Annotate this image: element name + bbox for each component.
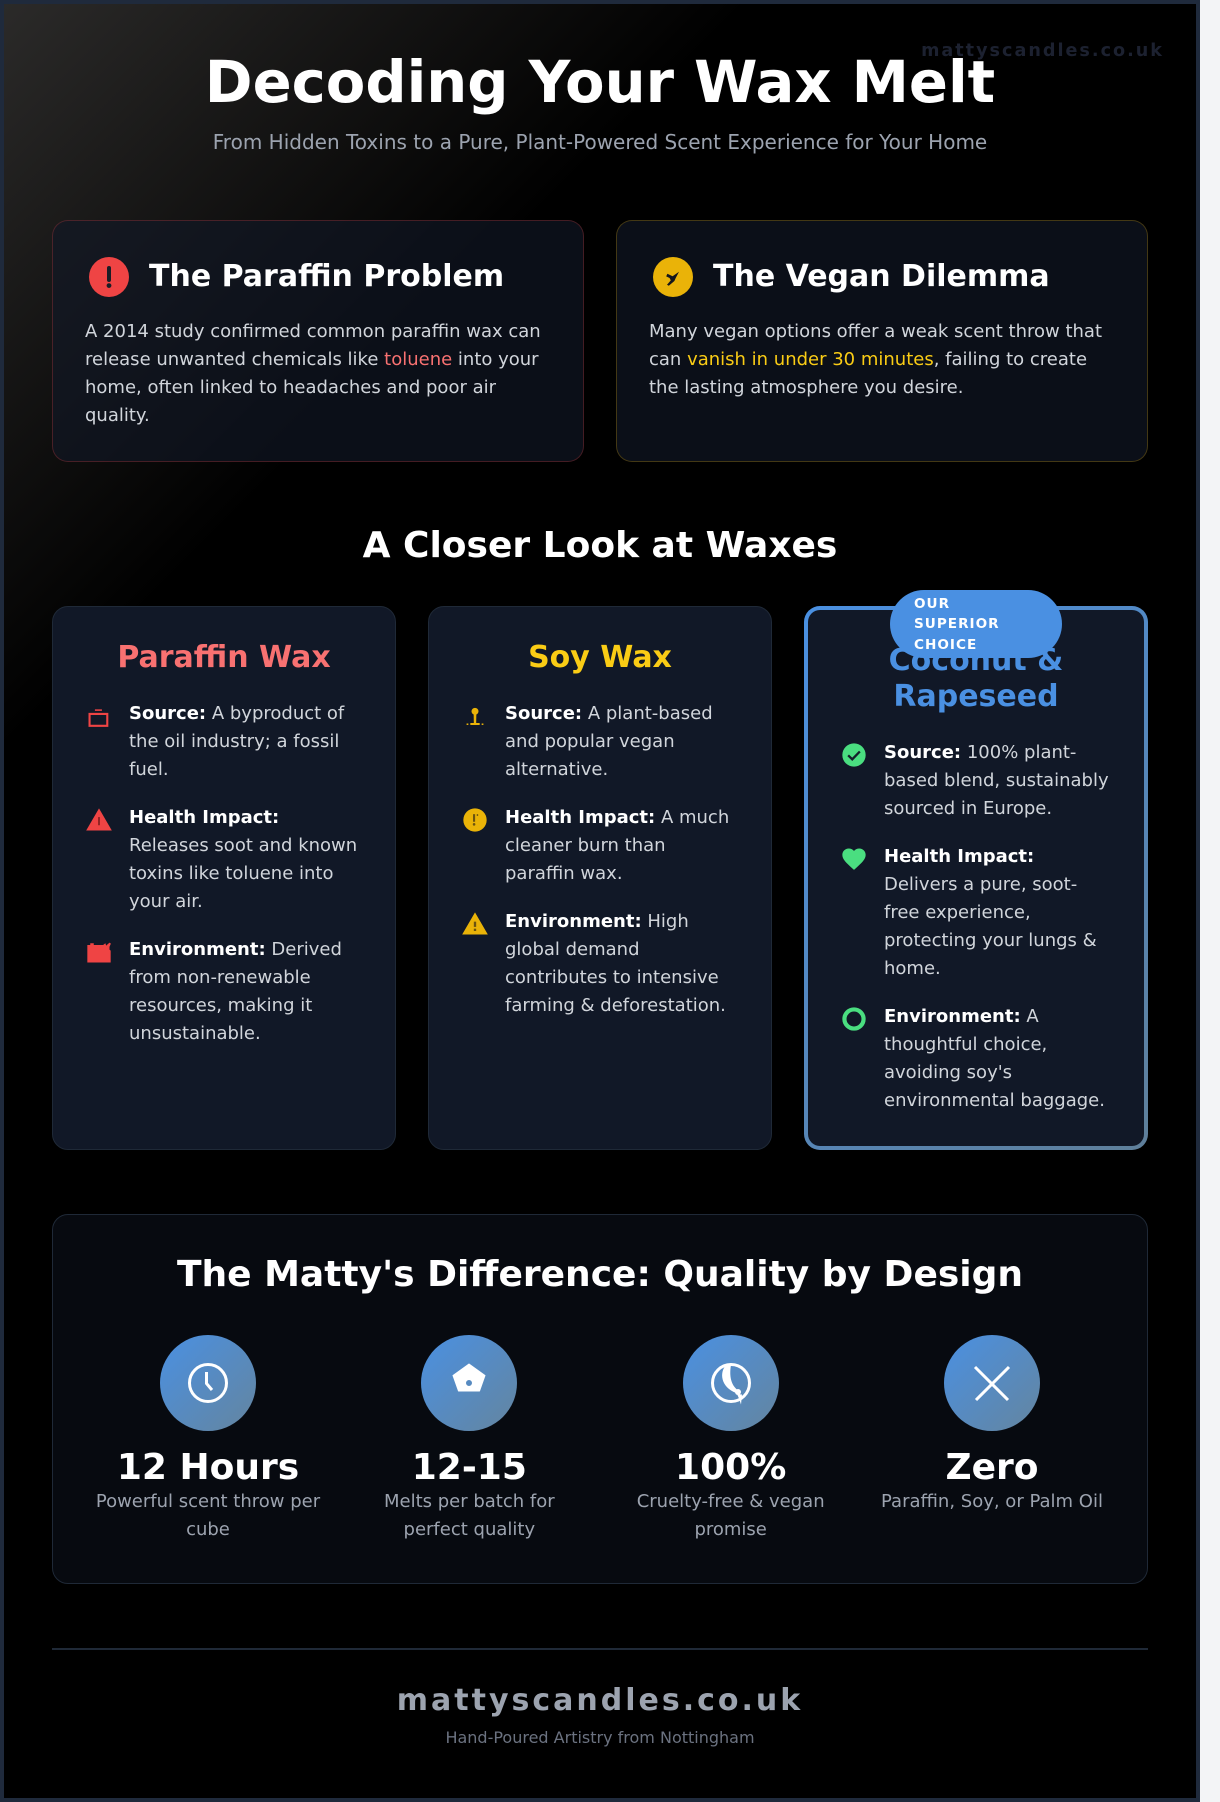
item: coconut environment: Environment: A xyxy=(884,1006,1039,1027)
stat value: 12 Hours xyxy=(117,1447,299,1488)
item: coconut health: Health Impact: xyxy=(884,846,1034,867)
item: paraffin health: Health Impact: xyxy=(129,807,279,828)
item: soy source: Source: A plant-based xyxy=(505,703,713,724)
item: coconut source: Source: 100% plant- xyxy=(884,742,1076,763)
panel: the matty's difference xyxy=(52,1214,1148,1584)
panel: coconut and rapeseed xyxy=(804,606,1148,1150)
stat: 12 hours xyxy=(96,1335,320,1540)
text: paraffin problem: release unwanted chemicals like toluene into your xyxy=(85,349,539,370)
item: paraffin environment: Environment: Derived xyxy=(129,939,342,960)
item: paraffin environment xyxy=(87,939,342,1044)
subtitle: From Hidden Toxins to a Pure, Plant-Powered Scent Experience for Your Home xyxy=(213,130,987,154)
heading: coconut and rapeseed xyxy=(889,643,1063,714)
stat label: Paraffin, Soy, or Palm Oil xyxy=(881,1490,1103,1512)
item: coconut source: based blend, sustainably xyxy=(884,770,1109,791)
stat label: perfect quality xyxy=(404,1518,535,1540)
icon: clock xyxy=(160,1335,256,1431)
badge: our superior choice xyxy=(890,590,1062,658)
item: soy source: and popular vegan xyxy=(505,731,675,752)
stat label xyxy=(96,1490,320,1540)
item: coconut health: home. xyxy=(884,958,941,979)
item: paraffin source xyxy=(88,703,345,780)
stat: 12-15 xyxy=(384,1335,555,1540)
item: paraffin environment: resources, making it xyxy=(129,995,312,1016)
item: coconut environment: thoughtful choice, xyxy=(884,1034,1047,1055)
stat: 100% xyxy=(637,1335,825,1540)
heading: coconut and rapeseed: Rapeseed xyxy=(893,679,1059,714)
watermark: mattyscandles.co.uk xyxy=(921,41,1164,61)
item: paraffin environment: unsustainable. xyxy=(129,1023,261,1044)
text: vegan dilemma: Many vegan options offer a weak scent throw that xyxy=(649,321,1102,342)
panel: paraffin wax xyxy=(52,606,396,1150)
item: paraffin source: Source: A byproduct of xyxy=(129,703,344,724)
text: paraffin problem: A 2014 study confirmed common paraffin wax can xyxy=(85,321,541,342)
item: coconut health xyxy=(842,846,1097,979)
heading: paraffin wax: Paraffin Wax xyxy=(117,640,331,675)
item: soy source: alternative. xyxy=(505,759,608,780)
title: Decoding Your Wax Melt xyxy=(205,49,995,116)
item: soy environment: Environment: High xyxy=(505,911,689,932)
stat value: 12-15 xyxy=(412,1447,527,1488)
stat label: Powerful scent throw per xyxy=(96,1490,320,1512)
item: coconut environment: avoiding soy's xyxy=(884,1062,1012,1083)
stat label: Cruelty-free & vegan xyxy=(637,1490,825,1512)
item: coconut source xyxy=(842,742,1109,819)
item: coconut health: free experience, xyxy=(884,902,1031,923)
panel: the paraffin problem xyxy=(52,220,584,462)
text: paraffin problem: home, often linked to headaches and poor air xyxy=(85,377,496,398)
item: coconut health: protecting your lungs & xyxy=(884,930,1097,951)
badge: our superior choice: OUR xyxy=(914,596,950,612)
footer tagline: Hand-Poured Artistry from Nottingham xyxy=(445,1728,755,1747)
heading: paraffin problem: The Paraffin Problem xyxy=(149,259,504,294)
item: paraffin source: fuel. xyxy=(129,759,169,780)
heading: coconut and rapeseed: Coconut & xyxy=(889,643,1063,678)
heading: soy wax: Soy Wax xyxy=(528,640,672,675)
text: paraffin problem: quality. xyxy=(85,405,150,426)
stat: zero xyxy=(881,1335,1103,1512)
stat value: 100% xyxy=(675,1447,786,1488)
item: paraffin health xyxy=(86,807,357,912)
item: soy health: Health Impact: A much xyxy=(505,807,729,828)
item: coconut health: Delivers a pure, soot- xyxy=(884,874,1077,895)
icon: cruelty-free leaf ring xyxy=(683,1335,779,1431)
icon: cross xyxy=(944,1335,1040,1431)
section heading: a closer look: A Closer Look at Waxes xyxy=(363,525,837,566)
badge: our superior choice: CHOICE xyxy=(914,637,977,653)
item: soy environment: contributes to intensive xyxy=(505,967,719,988)
item: paraffin environment: from non-renewable xyxy=(129,967,311,988)
item: coconut source: sourced in Europe. xyxy=(884,798,1052,819)
stat label: Melts per batch for xyxy=(384,1490,555,1512)
heading: quality by design: The Matty's Difference: Quality by Design xyxy=(177,1254,1023,1295)
item: paraffin health: your air. xyxy=(129,891,203,912)
badge: our superior choice: SUPERIOR xyxy=(914,616,1000,632)
icon: pentagon melt xyxy=(421,1335,517,1431)
stat label xyxy=(637,1490,825,1540)
stat value: Zero xyxy=(945,1447,1038,1488)
item: paraffin source: the oil industry; a fossil xyxy=(129,731,339,752)
footer url: mattyscandles.co.uk xyxy=(397,1683,803,1718)
stat label xyxy=(384,1490,555,1540)
stat label: promise xyxy=(694,1518,767,1540)
stat label: cube xyxy=(186,1518,230,1540)
panel: the vegan dilemma xyxy=(616,220,1148,462)
text: paraffin problem xyxy=(85,321,541,426)
panel: soy wax xyxy=(428,606,772,1150)
text: vegan dilemma: the lasting atmosphere you desire. xyxy=(649,377,963,398)
text: vegan dilemma xyxy=(649,321,1102,398)
item: soy health: paraffin wax. xyxy=(505,863,623,884)
item: paraffin health: toxins like toluene into xyxy=(129,863,334,884)
item: soy environment xyxy=(462,911,726,1016)
item: coconut environment xyxy=(842,1006,1105,1111)
item: soy environment: farming & deforestation. xyxy=(505,995,726,1016)
item: soy health: cleaner burn than xyxy=(505,835,666,856)
item: soy health xyxy=(463,807,729,884)
item: paraffin health: Releases soot and known xyxy=(129,835,357,856)
item: soy source xyxy=(466,703,713,780)
text: vegan dilemma: can vanish in under 30 minutes, failing to create xyxy=(649,349,1087,370)
item: coconut environment: environmental baggage. xyxy=(884,1090,1105,1111)
heading: vegan dilemma: The Vegan Dilemma xyxy=(713,259,1050,294)
item: soy environment: global demand xyxy=(505,939,640,960)
